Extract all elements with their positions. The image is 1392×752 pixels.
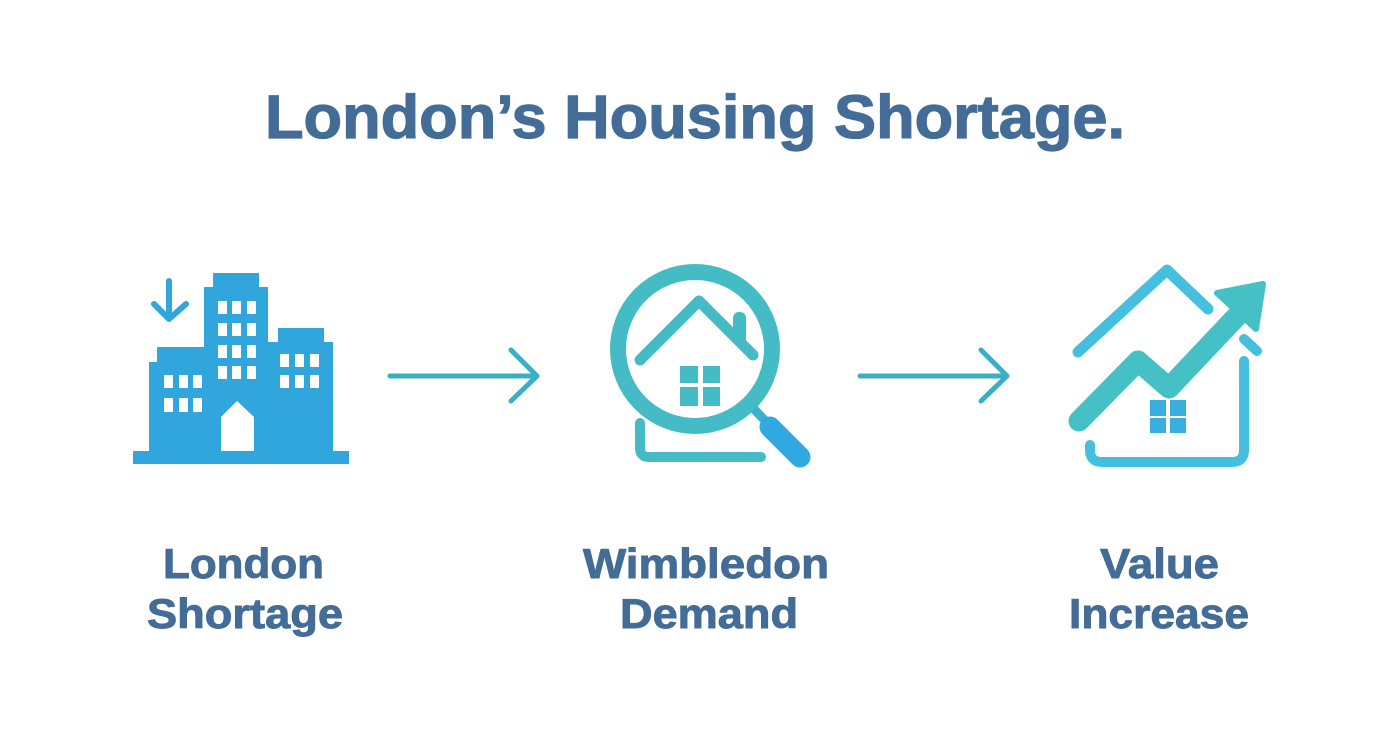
magnifier lens ring [618,272,772,426]
house wall base [640,423,761,457]
house window [680,366,720,406]
roof dash [1244,339,1257,351]
label: Wimbledon Demand [583,540,829,637]
label: Value Increase: Value [1100,540,1219,587]
icon: city buildings with down arrow [133,273,349,464]
icon: down arrow [154,281,186,319]
window [1150,400,1186,433]
label: London Shortage: Shortage [147,590,343,637]
buildings silhouette [133,273,349,464]
roof [1078,270,1208,352]
arrow: shortage to demand [390,350,537,401]
arrow: demand to value [860,350,1007,401]
house roof and chimney [640,301,753,360]
magnifier handle [754,409,772,428]
label: Value Increase: Increase [1069,590,1249,637]
icon: magnifier over house [618,272,800,457]
label: Wimbledon Demand: Wimbledon [583,540,829,587]
title: London’s Housing Shortage. [265,83,1125,151]
walls [1090,361,1244,462]
label: London Shortage [147,540,343,637]
label: London Shortage: London [163,540,324,587]
rising arrow head [1217,284,1263,329]
label: Wimbledon Demand: Demand [620,590,798,637]
icon: house with rising arrow [1078,270,1263,462]
label: Value Increase [1069,540,1249,637]
rising arrow line [1079,315,1238,421]
